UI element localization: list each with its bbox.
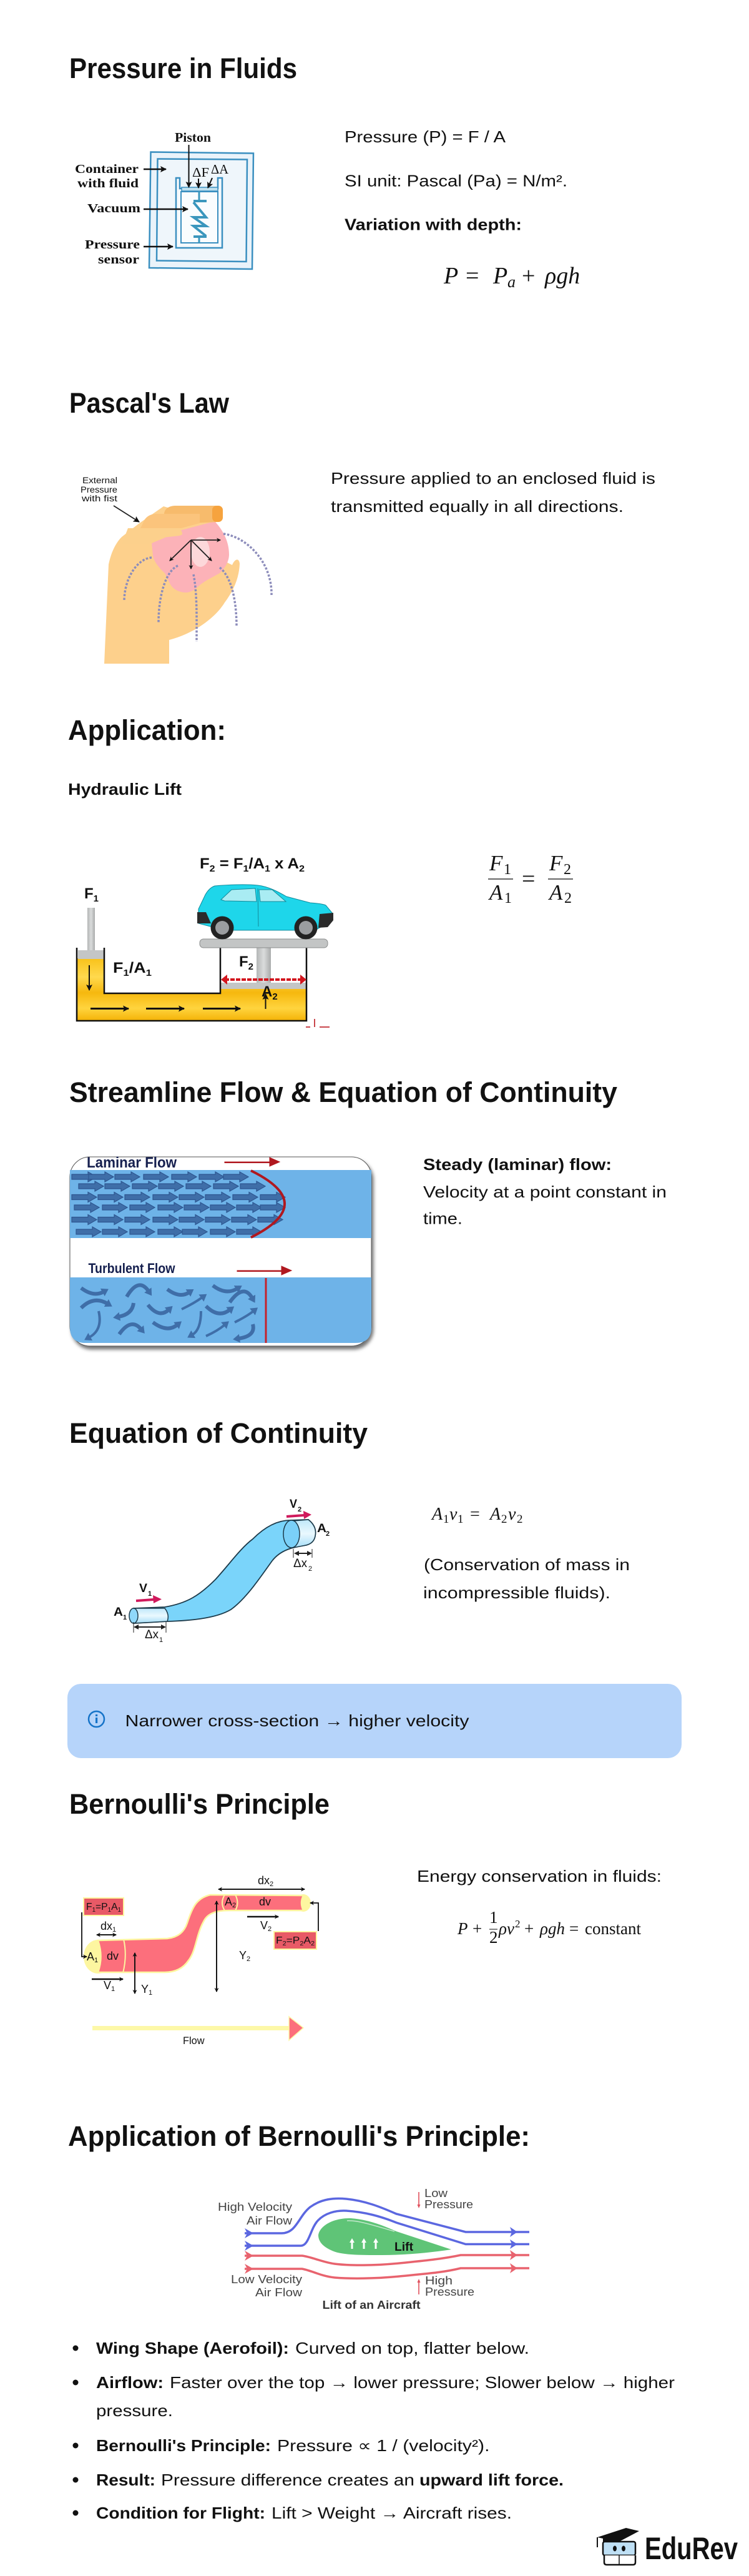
label: V1 and arrow: V [139,1582,147,1595]
light section A1 [131,1608,168,1623]
text: steady laminar flow [423,1155,667,1227]
diagram: lift of an aircraft [218,2187,529,2311]
diagram: hand squeezing fluid ball [81,476,272,664]
bullet: condition for flight [72,2504,512,2522]
box F1 = P1A1: 1 [118,1907,121,1914]
laminar arrows [72,1172,285,1237]
text: conservation of mass [423,1555,630,1602]
heading: Application: Application: [68,714,226,746]
label: delta x1 [134,1622,166,1644]
formula: F1/A1 = F2/A2: 2 [564,862,571,878]
labels: velocity and pressure: Low Velocity [231,2273,302,2286]
red streamlines [245,2255,529,2278]
bullet: wing shape: Wing Shape (Aerofoil): [96,2339,289,2357]
pipe labels: Y [239,1949,247,1962]
diagram: hydraulic lift [77,855,333,1027]
ball highlight [191,537,210,567]
hydraulic fluid [77,958,306,1021]
pipe labels: 1 [111,1985,115,1993]
formula: F1/A1 = F2/A2: = [522,866,535,892]
formula: Bernoulli equation [457,1908,641,1947]
label: delta F and delta A with arrows: ΔA [211,162,229,177]
label: F1/A1: /A [129,960,146,976]
spring [193,191,207,243]
label: external pressure with fist: External [82,476,117,485]
light section A2 [293,1520,316,1548]
formula: Bernoulli equation: ρv [498,1919,514,1938]
formula: F1/A1 = F2/A2: 2 [564,890,572,907]
box F2 = P2A2 [274,1932,316,1949]
platform [200,939,328,948]
labels: velocity and pressure: Pressure [424,2198,473,2211]
bullet: result: upward lift force. [419,2470,564,2489]
formula: A1v1 = A2v2: 2 [517,1513,523,1526]
pipe body [98,1895,303,1972]
pipe labels: A [87,1950,94,1963]
fingers [122,506,223,544]
label: A2: A [317,1522,326,1535]
label: A1: A [114,1606,123,1619]
pipe labels: dv [107,1950,119,1962]
label: F1/A1: 1 [123,968,129,978]
box F1 = P1A1: F [86,1902,92,1912]
box F2 = P2A2: 2 [311,1940,315,1947]
label: Piston [175,130,211,187]
labels: velocity and pressure: High [425,2274,453,2287]
formula: Bernoulli equation: constant [585,1919,641,1938]
label: F2 equation: 1 [243,863,248,874]
dashed jets [124,534,272,642]
vessel walls [77,948,306,1021]
labels: velocity and pressure: High Velocity [218,2201,292,2213]
labels: velocity and pressure: Pressure [425,2286,474,2298]
formula: A1v1 = A2v2: = [470,1505,480,1524]
label: delta F and delta A with arrows: ΔF [192,165,209,180]
pipe labels: A [225,1895,232,1908]
formula: Bernoulli equation: 1 [489,1908,498,1927]
label: V2 and arrow [286,1498,311,1519]
formula: A1v1 = A2v2: 2 [501,1513,507,1526]
formula: Bernoulli equation: = [569,1919,579,1938]
label: delta x2: Δx [293,1557,307,1570]
hand palm [104,506,240,664]
pipe labels: 2 [270,1880,273,1888]
text: conservation of mass: (Conservation of mass in [424,1555,630,1574]
pipe labels: 2 [268,1925,272,1933]
heading: Pressure in Fluids: Pressure in Fluids [69,52,297,84]
container outer and inner walls [149,152,253,269]
heading: Pascal's Law: Pascal's Law [69,387,230,419]
text: steady laminar flow: time. [423,1209,463,1227]
red area arrow [221,975,306,985]
label: A2: 2 [272,991,278,1002]
label: delta x1: Δx [145,1628,159,1641]
label: Vacuum: Vacuum [87,202,140,215]
cap ellipse A1 [129,1608,138,1623]
bullet: condition for flight: Condition for Flight: [96,2504,265,2522]
bullet: wing shape [72,2339,529,2357]
bullet: condition for flight: Lift > Weight → Aircraft rises. [272,2504,512,2522]
cap ellipse A2 [283,1520,300,1548]
icon: info [89,1711,104,1727]
label: delta x2: 2 [308,1565,312,1573]
label: F2: F [239,953,248,970]
pipe labels: dx [258,1874,270,1887]
labels: velocity and pressure [218,2187,474,2299]
label: A2 [317,1522,330,1538]
car [197,885,333,939]
large piston and rod [221,947,306,989]
box F2 = P2A2: =P [286,1935,300,1946]
small piston and rod [78,908,104,959]
label: external pressure with fist [81,476,139,522]
section: pressure in fluids [69,52,580,291]
panel card [70,1157,371,1346]
formula: A1v1 = A2v2: v [508,1505,516,1524]
box F1 = P1A1: 1 [92,1907,95,1914]
caption: Lift of an Aircraft: Lift of an Aircraft [322,2299,421,2311]
label: delta x2 [293,1549,312,1573]
section: application of Bernoulli's principle [68,2120,675,2522]
label: Piston: Piston [175,130,211,145]
label: A1: 1 [123,1614,127,1621]
pipe labels: 1 [112,1926,116,1934]
heading: Bernoulli's Principle: Bernoulli's Principle [69,1788,330,1820]
bullet: Bernoulli's principle [72,2436,489,2455]
label: Container with fluid [75,162,166,190]
section: equation of continuity [67,1417,682,1758]
text: steady laminar flow: Velocity at a point constant in [423,1182,667,1201]
flow arrow: Flow [183,2035,205,2047]
label: delta F and delta A with arrows [192,162,229,188]
pipe labels: 2 [247,1955,250,1963]
label: Pressure sensor: sensor [98,253,139,267]
text: steady laminar flow: Steady (laminar) flow: [423,1155,612,1174]
box F2 = P2A2: 2 [283,1940,286,1947]
label: F2 equation [200,855,305,874]
box F2 = P2A2: A [303,1935,311,1946]
pipe labels: 1 [149,1989,152,1997]
formula: F1/A1 = F2/A2: 1 [504,890,512,907]
pressure arrows [170,540,220,569]
laminar band [70,1170,371,1238]
pipe labels [87,1874,273,1997]
box F1 = P1A1: =P [95,1902,108,1912]
turbulent band [70,1277,371,1343]
pipe labels: dx [100,1920,112,1932]
pipe labels: 1 [94,1957,98,1964]
diagram: pressure sensor container [75,130,253,269]
label: F2: 2 [248,961,253,972]
label: F2 equation: F [200,855,209,872]
bullet: airflow: Airflow: [96,2373,164,2392]
bullet: airflow: Faster over the top → lower pressure; Slower below → higher [170,2373,675,2392]
label: F1: F [84,885,94,902]
formula: pressure at depth [443,263,580,291]
formula: pressure at depth: ρgh [544,263,580,289]
bullet: result: Result: [96,2470,155,2489]
formula: Bernoulli equation: + [472,1919,482,1938]
heading: Application of Bernoulli's Principle: Application of Bernoulli's Principle: [68,2120,530,2152]
label: F2 equation: /A [248,855,265,872]
label: external pressure with fist: with fist [81,494,117,503]
box F2 = P2A2: 2 [300,1940,304,1947]
pipe labels: dv [259,1895,271,1908]
labels: velocity and pressure: Low [424,2187,448,2200]
laminar velocity profile [251,1171,285,1237]
diagram: tube of flow [114,1498,330,1644]
label: F2 equation: 1 [265,863,270,874]
turbulent velocity line [265,1278,267,1343]
formula: pressure at depth: = [466,263,479,289]
turbulent swirls [81,1285,253,1339]
flow arrow [92,2017,303,2047]
pipe left yellow end [84,1940,112,1974]
pipe labels: 2 [232,1902,236,1909]
stray marks [306,1019,330,1027]
formula: F1/A1 = F2/A2: 1 [504,862,511,878]
text: conservation of mass: incompressible fluids). [423,1583,610,1602]
text: SI unit: SI unit: Pascal (Pa) = N/m². [345,171,567,190]
arrow: turbulent direction [237,1266,291,1275]
label: F2 equation: 2 [299,863,305,874]
label: F2 equation: x A [270,855,299,872]
formula: Bernoulli equation: 2 [489,1928,498,1947]
flow arrows [89,965,266,1009]
label: Pressure sensor: Pressure [85,238,140,252]
bullet: Bernoulli's principle: Pressure ∝ 1 / (velocity²). [277,2436,489,2455]
callout text: Narrower cross-section → higher velocity [125,1711,469,1730]
label: A2: 2 [326,1530,330,1538]
label: F2 equation: = F [215,855,243,872]
aerofoil [318,2218,451,2255]
streamline arrowheads [245,2227,517,2274]
formula: pressure at depth: P [443,263,458,289]
label: V1 and arrow: 1 [148,1590,152,1598]
formula: A1v1 = A2v2: 1 [443,1513,449,1526]
label: A1 [114,1606,127,1621]
icon: graduation mascot [597,2528,639,2565]
subheading: Hydraulic Lift: Hydraulic Lift [68,780,182,799]
text: Pascal's law statement [331,469,655,516]
box F1 = P1A1: A [111,1902,118,1912]
callout: narrower cross-section [67,1684,682,1758]
formula: F1/A1 = F2/A2: A [548,880,563,905]
diagram: laminar and turbulent flow [70,1154,371,1346]
text: Pascal's law statement: transmitted equally in all directions. [331,497,624,516]
bullet: result: Pressure difference creates an [161,2470,414,2489]
formula: F1/A1 = F2/A2: A [488,880,503,905]
labels: velocity and pressure: Air Flow [255,2286,303,2299]
box F1 = P1A1 [84,1898,124,1915]
pipe right yellow end [296,1894,311,1912]
white lift arrows [350,2238,378,2249]
text: Pascal's law statement: Pressure applied to an enclosed fluid is [331,469,655,488]
heading: Streamline Flow & Equation of Continuity: Streamline Flow & Equation of Continuity [69,1076,617,1108]
bullet: airflow: pressure. [96,2401,173,2420]
force and motion arrows [82,1889,318,1993]
section: Bernoulli's principle [69,1788,662,2047]
fluid ball [152,521,229,592]
label: V1 and arrow [136,1582,162,1603]
bullet: wing shape: Curved on top, flatter below. [295,2339,529,2357]
formula: A1v1 = A2v2 [431,1505,523,1526]
label: F2 equation: 2 [210,863,215,874]
section: Pascal's law [69,387,655,664]
label: Lift: Lift [394,2241,414,2254]
aerofoil highlight [347,2221,394,2231]
formula: Bernoulli equation: ρgh [539,1919,565,1938]
formula: Bernoulli equation: P [457,1919,468,1938]
section: application hydraulic lift [68,714,573,1027]
formula: F1/A1 = F2/A2: F [549,851,563,875]
formula: A1v1 = A2v2: v [449,1505,458,1524]
tube body [134,1520,316,1623]
bullet: result [72,2470,564,2489]
arrow: laminar direction [225,1158,280,1166]
text: Variation with depth: Variation with depth: [345,215,522,234]
formula: pressure at depth: P [492,263,507,289]
labels: velocity and pressure: Air Flow [247,2215,293,2227]
text: energy conservation: Energy conservation in fluids: [417,1867,662,1885]
formula: Bernoulli equation: 2 [515,1918,521,1930]
bullet: airflow [72,2373,675,2420]
pipe section lines [123,1895,237,1973]
bullet: Bernoulli's principle: Bernoulli's Principle: [96,2436,271,2455]
label: F1/A1: 1 [146,968,152,978]
formula: pressure at depth: + [522,263,535,289]
formula: Bernoulli equation: + [524,1919,534,1938]
box F1 = P1A1: 1 [108,1907,112,1914]
text: pressure definition: Pressure (P) = F / A [345,127,506,146]
bullet list [72,2339,675,2522]
section: streamline flow [69,1076,667,1346]
label: Turbulent Flow: Turbulent Flow [89,1261,175,1276]
formula: pressure at depth: a [507,273,516,291]
formula: F1/A1 = F2/A2 [488,851,573,907]
label: delta x1: 1 [159,1636,163,1644]
pipe labels: V [260,1919,268,1932]
formula: A1v1 = A2v2: A [489,1505,501,1524]
heading: Equation of Continuity: Equation of Continuity [69,1417,368,1449]
formula: F1/A1 = F2/A2: F [489,851,503,875]
blue streamlines [245,2198,529,2246]
pipe labels: V [104,1979,111,1992]
label: Container with fluid: Container [75,162,139,176]
box F2 = P2A2: F [276,1935,282,1946]
label: F1: 1 [94,893,99,904]
formula: A1v1 = A2v2: A [431,1505,443,1524]
logo: EduRev [597,2528,738,2566]
label: A2: A [262,983,272,1000]
label: Pressure sensor [85,238,173,267]
pipe labels: Y [141,1983,149,1995]
label: V2 and arrow: V [290,1498,297,1511]
label: external pressure with fist: Pressure [81,485,117,494]
label: Laminar Flow: Laminar Flow [87,1154,177,1171]
label: Container with fluid: with fluid [77,177,139,190]
label: V2 and arrow: 2 [298,1506,301,1513]
formula: A1v1 = A2v2: 1 [458,1513,463,1526]
pressure arrows [417,2192,421,2294]
label: F1/A1: F [113,960,122,976]
diagram: Bernoulli pipe [82,1874,318,2047]
